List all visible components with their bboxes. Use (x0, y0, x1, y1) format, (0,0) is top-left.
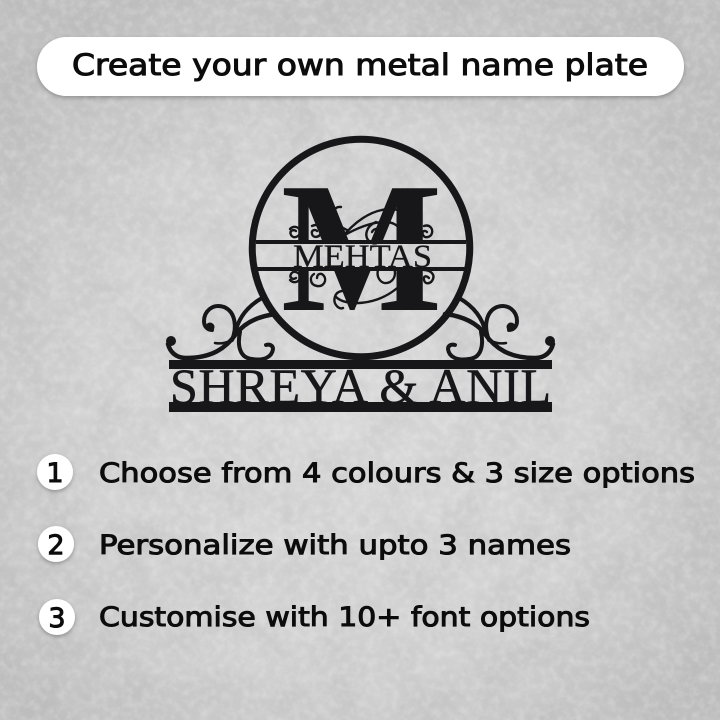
title text: Create your own metal name plate (72, 48, 648, 82)
feature 3 (39, 599, 590, 635)
number badge 3 (39, 599, 75, 635)
emblem ring (252, 139, 470, 357)
feature 2 (38, 526, 571, 562)
feature 1 (37, 454, 695, 490)
title pill (37, 37, 684, 96)
number badge 2 (38, 526, 74, 562)
left scroll ornament (166, 298, 276, 360)
feature 3 text: Customise with 10+ font options (99, 602, 590, 633)
number badge 1: 1 (46, 458, 64, 489)
names text: SHREYA & ANIL (170, 358, 551, 414)
metal name plate emblem (166, 139, 555, 414)
number badge 3: 3 (48, 603, 66, 634)
upper name bar (169, 360, 552, 369)
monogram letter M: M (281, 145, 442, 351)
right scroll ornament (445, 298, 555, 360)
monogram flourishes (290, 207, 433, 308)
band rules (256, 240, 466, 244)
lower name bar (169, 402, 552, 412)
feature 1 text: Choose from 4 colours & 3 size options (99, 458, 695, 489)
family name text: MEHTAS (293, 239, 432, 275)
feature 2 text: Personalize with upto 3 names (99, 530, 571, 561)
number badge 1 (37, 454, 73, 490)
number badge 2: 2 (47, 530, 65, 561)
